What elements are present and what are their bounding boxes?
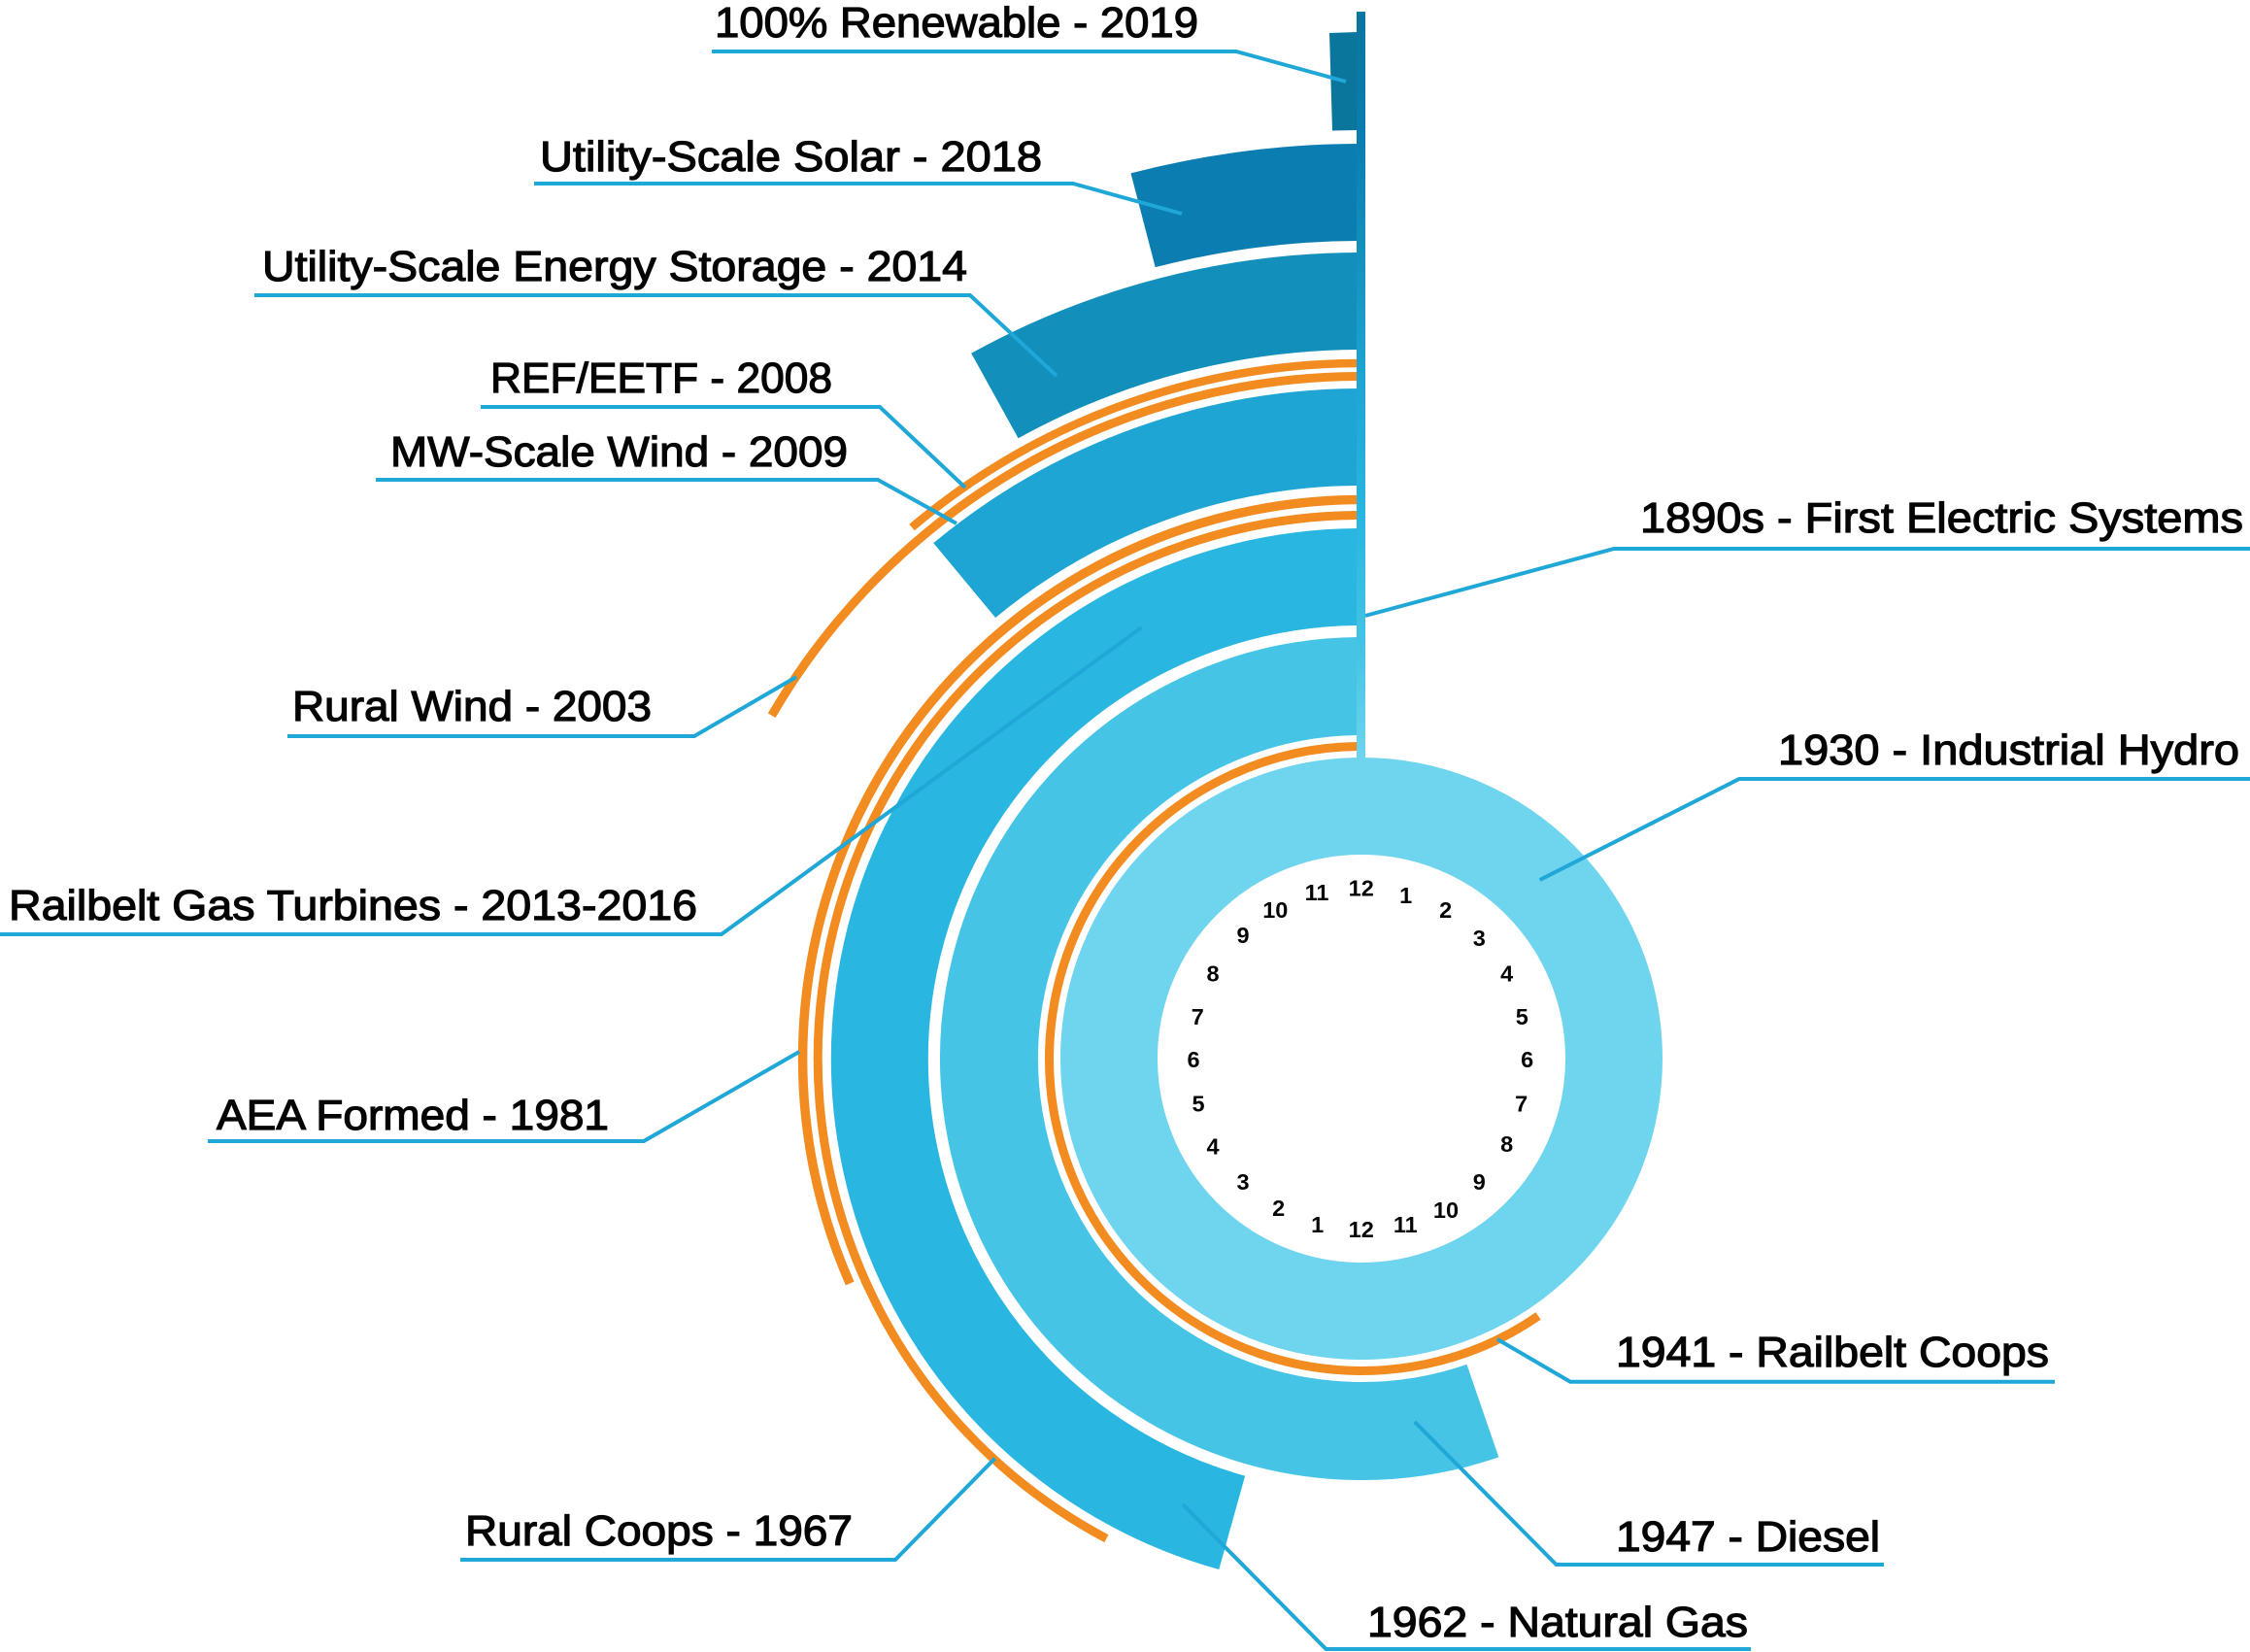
label: Railbelt Gas Turbines - 2013-2016 [0, 627, 1142, 934]
label: Rural Coops - 1967: Rural Coops - 1967 [465, 1508, 853, 1555]
label: 1941 - Railbelt Coops [1497, 1330, 2055, 1382]
label: MW-Scale Wind - 2009: MW-Scale Wind - 2009 [390, 429, 848, 476]
label: 1962 - Natural Gas: 1962 - Natural Gas [1367, 1600, 1748, 1646]
arc: REF/EETF 2008 [912, 363, 1361, 527]
clock face numbers: 2 [1439, 897, 1452, 923]
clock face numbers [1187, 876, 1533, 1242]
label: 1947 - Diesel: 1947 - Diesel [1616, 1514, 1880, 1561]
arc: Rural Wind 2003 [772, 377, 1361, 716]
label: 1890s - First Electric Systems [1365, 495, 2250, 616]
arc: AEA Formed 1981 [803, 499, 1361, 1284]
ring: Utility-Scale Solar [1143, 192, 1361, 220]
label: 1947 - Diesel [1415, 1422, 1884, 1565]
clock face numbers: 4 [1500, 961, 1513, 987]
clock face numbers: 2 [1272, 1196, 1285, 1221]
label: 1890s - First Electric Systems: 1890s - First Electric Systems [1640, 495, 2243, 542]
ring: Utility-Scale Energy Storage [994, 301, 1361, 396]
ring: 1962 Natural Gas [880, 577, 1361, 1523]
label: 1930 - Industrial Hydro: 1930 - Industrial Hydro [1778, 727, 2239, 774]
clock face numbers: 5 [1516, 1004, 1528, 1029]
block: 100% Renewable [1329, 32, 1358, 130]
label: Rural Wind - 2003 [287, 677, 796, 736]
label: 1962 - Natural Gas [1183, 1504, 1751, 1649]
label: Utility-Scale Energy Storage - 2014: Utility-Scale Energy Storage - 2014 [262, 244, 967, 290]
clock face numbers: 5 [1192, 1092, 1205, 1117]
clock face numbers: 6 [1187, 1047, 1200, 1072]
label: Utility-Scale Solar - 2018 [534, 134, 1182, 214]
ring: 1947 Diesel [990, 686, 1483, 1432]
label: 100% Renewable - 2019: 100% Renewable - 2019 [715, 0, 1198, 47]
clock face numbers: 9 [1473, 1169, 1486, 1195]
label: 1941 - Railbelt Coops: 1941 - Railbelt Coops [1616, 1330, 2049, 1376]
label: REF/EETF - 2008 [481, 355, 965, 488]
clock face numbers: 7 [1515, 1092, 1528, 1117]
arc: 1941 Railbelt Coops [1050, 746, 1538, 1371]
clock face numbers: 7 [1192, 1004, 1204, 1029]
clock face numbers: 3 [1236, 1169, 1250, 1195]
clock face numbers: 11 [1305, 880, 1328, 905]
clock face numbers: 1 [1311, 1212, 1324, 1237]
clock face numbers: 8 [1206, 961, 1220, 987]
clock face numbers: 12 [1349, 1217, 1374, 1242]
label: Rural Coops - 1967 [460, 1459, 994, 1560]
clock face numbers: 10 [1262, 897, 1288, 923]
label: Utility-Scale Solar - 2018: Utility-Scale Solar - 2018 [540, 134, 1042, 181]
clock face numbers: 1 [1399, 883, 1412, 908]
ring: 1930 Industrial Hydro [1109, 806, 1614, 1311]
clock face numbers: 8 [1500, 1131, 1513, 1157]
vertical timeline bar [1357, 12, 1365, 758]
clock face numbers: 6 [1521, 1047, 1533, 1072]
arc: Rural Coops 1967 [818, 515, 1361, 1538]
label: Rural Wind - 2003: Rural Wind - 2003 [292, 684, 652, 730]
label: REF/EETF - 2008: REF/EETF - 2008 [490, 355, 832, 402]
label: 100% Renewable - 2019 [712, 0, 1346, 82]
label: Utility-Scale Energy Storage - 2014 [254, 244, 1057, 376]
clock face numbers: 10 [1433, 1197, 1459, 1223]
label: MW-Scale Wind - 2009 [376, 429, 957, 523]
clock face numbers: 12 [1349, 876, 1374, 901]
label: 1930 - Industrial Hydro [1540, 727, 2250, 880]
label: Railbelt Gas Turbines - 2013-2016: Railbelt Gas Turbines - 2013-2016 [9, 883, 697, 929]
label: AEA Formed - 1981 [208, 1052, 799, 1141]
clock face numbers: 4 [1206, 1134, 1220, 1160]
ring: MW-Scale Wind [964, 437, 1361, 581]
clock face numbers: 9 [1236, 923, 1250, 948]
clock face numbers: 3 [1473, 926, 1486, 951]
clock face numbers: 11 [1394, 1212, 1418, 1237]
label: AEA Formed - 1981: AEA Formed - 1981 [217, 1093, 609, 1139]
